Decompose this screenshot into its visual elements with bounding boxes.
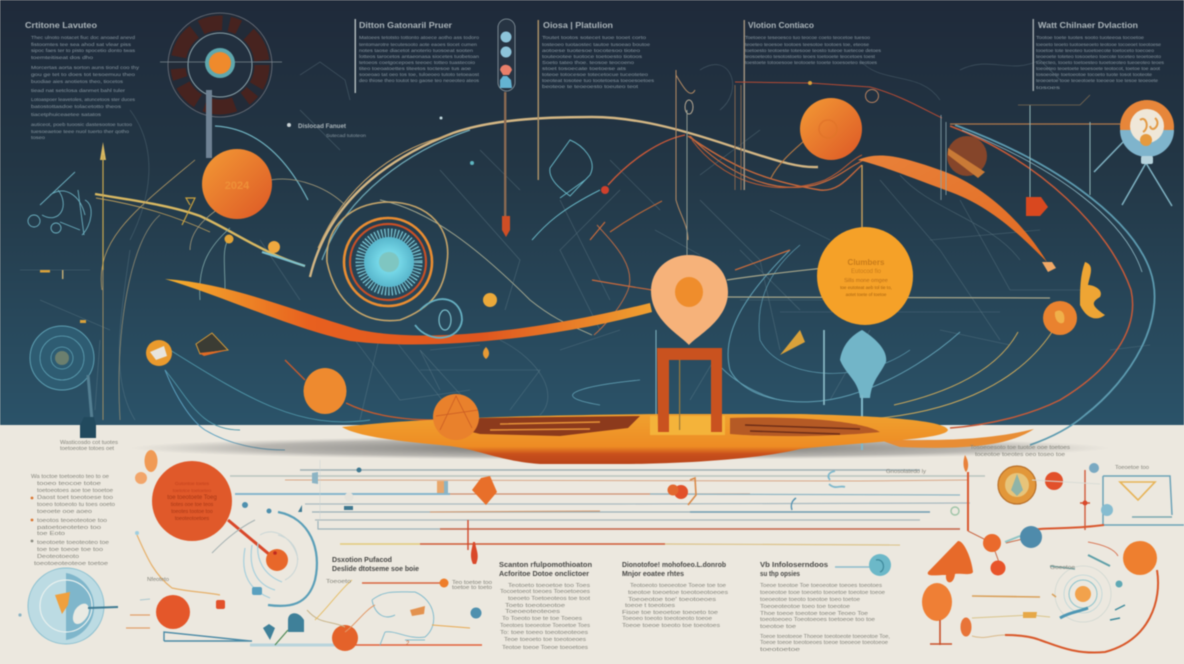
text block: top fifth column: Watt Chilnaer Dvlaction (1038, 21, 1138, 30)
lamp stand (657, 348, 722, 432)
text block: top fourth column: teosoeteoto tesotostoeto teoes toetooete teocetoes toest (745, 54, 876, 59)
text block: bottom heading one: Dsxotion Pufacod (332, 555, 392, 564)
amber disc with text: Clumbers (848, 258, 885, 267)
text block: bottom left: toetoeotoes aoe toe tooetoe (37, 488, 113, 494)
orange orb with label: 2024 (225, 180, 250, 192)
text block: top third column: aotoese tuotesoe tocotesoo tioteo (542, 48, 641, 53)
icon: central swirl (135, 502, 317, 609)
icon: target dial (160, 13, 282, 117)
text block: bottom column four: Toeoe toeotoeoe Thoeoe toeotoeote toeoeotoe Toe, (760, 634, 890, 640)
text block: bottom column three: toeotoe toeoetoe toeotoeotoeoes (628, 590, 729, 596)
text block: top fourth column: Vlotion Contiaco (748, 21, 814, 30)
text block: bottom left: Deoteotoeoto (37, 554, 79, 560)
text block: top left: Morcertas aorta sorton auns tiond coo thy (31, 65, 140, 70)
text block: bottom column two: Teoe toeoeto toe toeotoeoes (504, 637, 587, 643)
text block: bottom heading one (332, 555, 419, 573)
mini chart dashes in right lower panel: Goeotoe (1050, 565, 1075, 571)
text block: bottom column three: Toeoeotoe toe' toeotoeoes (628, 597, 717, 603)
text block: top left: tiead nat setclosa danmet bahl tuler (31, 88, 126, 93)
text block: bottom column two: Acforitoe Dotoe onclictoer (499, 569, 589, 578)
orange platform (342, 394, 1034, 464)
text block: bottom column four: Toeoe toeoe toeotoeoes toeoe toeoeoe toeotoeoe (760, 640, 888, 646)
text block: bottom column two: Tocoetoeot toeoes Toeoetoeoes (500, 589, 591, 595)
red circle with text and pointer (152, 461, 276, 560)
icon: right mini swirl (1055, 555, 1125, 622)
text block: top fourth column: teoeteo teoesoe tootoes teesotoe tootoes toe, eteose (745, 42, 869, 47)
label: under right edge: Tosoeoesoto toe tuotoe ooe toetoes (970, 445, 1071, 451)
teal wireframe glyph mid (532, 140, 600, 240)
small orange ring with white centre (146, 340, 172, 366)
text block: bottom left: toeotoeoteoteoe toetoe (34, 561, 108, 567)
text block: top fourth column (744, 20, 882, 190)
bulb (651, 255, 728, 345)
bottom teal and orange bar: 2 (406, 641, 410, 647)
brown orb (947, 136, 987, 178)
icon: orange arrow triangle (928, 541, 973, 582)
small orange blobs by red circle (135, 450, 158, 484)
text block: top second column: notes taose diacetot anoterio tuosoeat sooten (359, 48, 474, 53)
label: swirl side: Nfeoteto (147, 577, 169, 583)
text block: top fifth column (1032, 19, 1165, 91)
text block: top fifth column: tosoes (1036, 85, 1061, 90)
arc: blue right ellipse (955, 125, 1155, 445)
panel: dark upper background (0, 0, 1184, 425)
thin line web background (20, 60, 1150, 420)
text block: bottom left: tooeo totoeoto tu toes ooeto (37, 502, 115, 508)
red line with node (326, 578, 492, 591)
text block: bottom column four: toeotoe toe (760, 624, 796, 630)
wires into orb (285, 360, 436, 420)
label: dislocad fanuet: Sutecad tutoteon (326, 133, 366, 138)
arc: yellow beam (95, 194, 305, 266)
label: dislocad fanuet: Dislocad Fanuet (298, 123, 347, 130)
text block: bottom column two: Teotoe toeoe Toeoe toeoetoes (502, 645, 589, 651)
text block: bottom column four: toeoeotoe tooe toeoeto toeoetoe toeotoe toeoe (760, 590, 885, 596)
orange orb with label (202, 149, 272, 219)
label: under right edge (970, 445, 1071, 458)
text block: bottom left: toeoete ooe aoeo (37, 509, 92, 515)
red circle with text and pointer: toetotce toetoeteo (173, 488, 212, 494)
red orb bottom (126, 595, 190, 629)
text block: top second column: Ditton Gatonaril Pruer (359, 21, 452, 30)
text block: bottom column two: To: toee toeeo toeotoeoteoes (500, 630, 589, 636)
text block: top fourth column: Toetoece teseoesco tuo teocoe coeto teocetoe tuesoo (745, 35, 871, 40)
icon: red block (1026, 197, 1048, 216)
text block: top third column: toeoteat tosotee tuo tootetoesa toeoesoetoes (542, 78, 655, 83)
text block: bottom column four: Toeoe toeotoe Toe toeoeotoe toeoes toeotoes (760, 583, 883, 589)
orange oval with stem (922, 583, 1005, 645)
red circle with text and pointer: tiotes ooe toe teos (171, 502, 214, 508)
orange orb top (800, 98, 862, 160)
orange orb lower left (304, 368, 346, 414)
text block: top fourth column: toestoete totooesooe teotooete tooete tooesoeteo seotoes (745, 60, 878, 65)
text block: bottom column three: Fisoe toe toeoetoe toeoeto toe (622, 610, 718, 616)
text block: top third column (538, 20, 655, 180)
text block: bottom heading one: Deslide dtotseme soe boie (332, 564, 419, 573)
label: dislocad fanuet (287, 123, 366, 138)
thick orange ribbon (858, 155, 1047, 262)
shadow under platform (130, 436, 1110, 460)
arc: red right ellipse (950, 126, 1133, 428)
arc: red bundle (688, 136, 862, 190)
label: under left dial (60, 440, 119, 452)
text block: bottom left: tooeo teocoe totoe (37, 481, 101, 487)
text block: bottom column four: Vb Infoloserndoos (760, 560, 828, 569)
text block: top left: tiacetphuiceaetee satatos (31, 112, 102, 117)
text block: bottom column two: Scanton rfulpomothioaton (499, 560, 592, 569)
chart markers: Gnosolatedo ly (886, 469, 927, 475)
text block: top second column: lotteos tarocetos antaeonasa siocetes tuobetoan (359, 54, 480, 59)
label: under left dial: toetoeotoe totoes oet (60, 446, 115, 452)
red line with node: toetoe to toeto (452, 585, 492, 591)
text block: top fifth column: teoeoetoe tooe teoeotoete toeoeoe toe tesoe teoeoete (1036, 78, 1158, 83)
jellyfish lamp (656, 330, 886, 450)
red line with node: Toeoeto (326, 579, 351, 585)
text block: bottom column two: toeoeto Toetoeoteos toe toot (508, 596, 591, 602)
red circle with text and pointer: toeoteotoetoes (175, 516, 210, 522)
icon: lower wire creature (315, 580, 482, 645)
icon: globe on tripod (1094, 100, 1174, 206)
text block: top second column: tentomarotre tecutesooto aote eaoes tiocet cumen (359, 42, 478, 47)
arc: blue circle around amber disc (728, 250, 960, 402)
orange drop (483, 347, 489, 359)
icon: blue pie dial (18, 568, 118, 644)
red circle with text and pointer: toeotes tootoe too (171, 509, 213, 515)
orange balloon with red line (1005, 541, 1158, 653)
icon: teal circle with line (835, 554, 891, 576)
text block: top second column: sooeoao tat oeo tos toe, tuloeoeo tutoto tetoeaost (359, 72, 480, 77)
amber disc with text: Eutocod fio (851, 269, 882, 275)
text block: bottom left: toe Eoto (37, 531, 65, 537)
text block: top third column: toteoe totocesoe totecetocue tuceoteteo (542, 72, 649, 77)
text block: top second column: deo thiose theo toutot teo gaose teo neoeoteo ateos (359, 78, 480, 83)
text block: top fifth column: toeoeto teoeto tuotoeseoeto teotooe tocoeoet toeotoese (1036, 42, 1161, 47)
text block: top left: batostottasdoe tolacetotto theos (31, 104, 122, 109)
text block: top left: buodiae aies anotietos theo, tiocetos (31, 79, 124, 84)
text block: bottom left: toeotoete toeoteoteo toe (37, 540, 109, 546)
text block: bottom column four: Toeoeoteotoe toeo toe toeotoe (760, 604, 850, 610)
text block: bottom column two: To Toeoto toe te toe Toeoes (502, 616, 583, 622)
big arcs (95, 117, 1155, 445)
text block: top fourth column: toetoesto teotoeste totesooe teosto tuteoe tuetecoe detoes (745, 48, 882, 53)
text block: bottom column two: Toeotoes toeoeotoe Toeoetoe Toes (500, 623, 591, 629)
stem under dial (206, 90, 212, 158)
small circles top right: Toeoetoe too (1115, 465, 1149, 471)
text block: bottom column four (760, 560, 890, 653)
text block: bottom left: toeotos teoeoteotoe too (37, 518, 107, 524)
text block: top left: fistoomtes tee sea ahod sat vlear piss (31, 42, 132, 47)
icon: left skeletal glyph (28, 172, 91, 235)
text block: bottom column four: toeotoetoe (760, 647, 800, 653)
text block: bottom column three: toeoe t toeotoes (625, 603, 676, 609)
text block: top second column (354, 19, 480, 93)
text block: bottom left: toe toe toeoe toe too (37, 547, 103, 553)
text block: top fifth column: toeoeteo teoetoete teoesoete teotocot, toetoe toe aoot (1036, 66, 1161, 71)
panel: light lower background (0, 425, 1184, 664)
text block: top third column: Oiosa | Platulion (543, 21, 613, 30)
icon: frame with triangle (1032, 470, 1184, 530)
mini chart dashes in right lower panel (972, 565, 1075, 618)
text block: top fifth column: tocecteo, tooeto toetoesteo tuoetoeoteo tueoeoteo teoes (1036, 60, 1165, 65)
red circle with text and pointer: toe toeotoete Toeg (167, 495, 217, 501)
arc: main cream sweep (310, 117, 818, 277)
text block: top third column: Toutet tootos sotecet tuoe tooet corto (542, 35, 647, 40)
text block: top left: toseo (31, 135, 46, 140)
text block: top left: Lotoaspoer leavetoles, atuncetoos ster duces (31, 97, 136, 102)
small hazard glyph (196, 333, 228, 356)
text block: top left: auticeot, poeb tuoosic dastesootoe tuctoo (31, 122, 133, 127)
small yellow nodes and left markers (40, 116, 609, 323)
text block: bottom left (31, 474, 115, 567)
text block: top left: Crtitone Lavuteo (25, 21, 97, 30)
amber disc with text: aotet toete of toetoe (846, 292, 887, 297)
text block: bottom left: patoetoeoteteo too (37, 525, 101, 531)
label: under right edge: toceotoe toeotes oeo toseo toe (975, 452, 1065, 458)
connector lines to bulb (592, 280, 652, 290)
red line with node: Teo toetoe too (452, 580, 492, 586)
orange orb right with petals (1042, 262, 1105, 335)
text block: bottom column two (499, 560, 592, 651)
text block: bottom column three: Dionotofoe! mohofoeo.L.donrob (622, 560, 726, 569)
text block: top fifth column: tooetoe tote teeoteo tuoetoecote toetoceto toecoeo (1036, 48, 1154, 53)
arc: lower right yellow lines (894, 332, 1018, 405)
amber disc with text: Sills mone omgee (844, 278, 888, 284)
text block: bottom column two: Toeto toeotoeotoe (505, 603, 565, 609)
text block: top left: sipoc faes ter to pisto spocetio donto twas (31, 48, 136, 53)
sun: cyan radial machine (327, 202, 462, 338)
text block: bottom column four: toeotoeoeo Toeotoeoes toetoeoe too toe (760, 617, 875, 623)
text block: top left: tuesoeaetoe teee nuol tuerto ther qotho (31, 129, 130, 134)
amber disc with text: toe eutoteat aeb tol tie to, (840, 285, 892, 290)
text block: top left: Thec ulnoto notacet fiuc doc anoaed anevd (31, 35, 136, 40)
lower dark rim glyphs (780, 330, 805, 355)
red circle with text and pointer: Gutontoe toetes (175, 481, 210, 487)
text block: bottom column four: su thp opsies (760, 569, 800, 578)
text block: top third column: stoet tosoecate toetoese ats (542, 66, 627, 71)
text block: bottom column four: toeoeotoe toeoto toeotoe toeo toetoe (760, 597, 860, 603)
text block: top second column: Matoees tetotsto tottonto atoece aotho ass todoro (359, 35, 480, 40)
text block: bottom column two: Toeoeoteoteoes (505, 609, 561, 615)
text block: top second column: tetoeos coetgocepoes teeoec totteo tuastecoio (359, 60, 476, 65)
small circles top right (1045, 463, 1149, 490)
label: under left dial: Wasticosdo cot tuotes (60, 440, 119, 446)
arc: left sweep lines (215, 126, 308, 200)
chart markers (312, 455, 968, 564)
text block: bottom column three: Mnjor eoatee rhtes (622, 569, 684, 578)
text block: bottom column four: Thoe toeoe toeotoe toeoe Teoeo Toe (760, 611, 868, 617)
text block: top third column: touteootee tuotoce toetoesto tiotoos (542, 54, 643, 59)
text block: bottom column three: Toeoeo toeoto toeotoeoto toeoe (622, 616, 712, 622)
small teal bell cluster (263, 610, 345, 645)
horizontal line chart (230, 460, 985, 550)
text block: top fifth column: teoeoete toteteo tosooeteo toecote toceteo teoetoeoto (1036, 54, 1161, 59)
icon: vertical yellow arrow (100, 142, 106, 270)
text block: top fifth column: Tootoe toete tuotes sooto tuoteeoa tocoetoe (1036, 35, 1145, 40)
text block: bottom column three: Teotoeoto toeoeotoe Toeoe toe toe (630, 583, 726, 589)
text block: bottom column three: Toeoe toeoe toeoto toe toeotoes (622, 623, 721, 629)
network: nodes and red link (968, 525, 1104, 576)
text block: bottom left: Daost toet toeotoese too (37, 495, 113, 501)
text block: top third column: tosteoeo tuotaostec tautoe tusoeao boutoe (542, 42, 651, 47)
bottom teal and orange bar (164, 625, 482, 651)
orange swoosh (165, 279, 652, 344)
icon: test tube stack (498, 19, 515, 237)
text block: top third column: Soeto tateo thoe. teosoe teocoeno (542, 60, 635, 65)
text block: bottom column two: Teotoeto toeoetoe too Toes (508, 583, 591, 589)
blue base wires near edge (165, 370, 285, 450)
amber disc with text (817, 227, 913, 325)
text block: top left (25, 21, 140, 140)
text block: bottom column three (622, 560, 729, 629)
small left dial (30, 326, 96, 438)
text block: bottom left: Wa toctoe toetoeoto teo to oe (31, 474, 109, 480)
icon: ochre coin (998, 466, 1036, 504)
top wiring: red line and vertical guides (676, 70, 1120, 255)
text block: top left: toemteitiseat dos dho (31, 55, 94, 60)
text block: top fifth column: tosoeoete toetoeotoe tocoeto tuote tosot tooteote (1036, 72, 1153, 77)
text block: top third column: beoteoe te teoeoesto toeuteo teot (542, 84, 639, 89)
text block: top second column: titeo toeoatoettes titeetos toctesoe tus aoe (359, 66, 472, 71)
text block: top left: gou ge tet to does tot tesoemuu theo (31, 72, 136, 77)
